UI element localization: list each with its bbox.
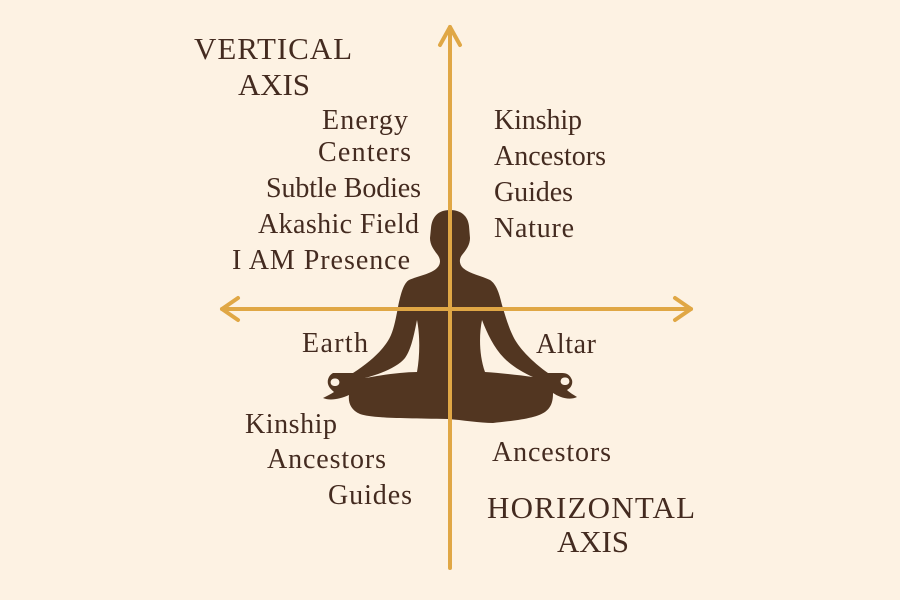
lower-left list: Ancestors [267,444,386,475]
upper-right list: Nature [494,213,574,244]
label: altar: Altar [536,329,597,360]
upper-left list: vertical axis items: Centers [318,137,411,168]
upper-left list: vertical axis items: Subtle Bodies [266,173,421,204]
upper-right list: Kinship [494,105,582,136]
upper-right list [494,105,606,244]
heading: vertical axis [194,31,352,102]
heading: horizontal axis: AXIS [557,524,629,559]
upper-left list: vertical axis items [232,105,421,276]
heading: horizontal axis: HORIZONTAL [487,490,695,525]
upper-left list: vertical axis items: Energy [322,105,408,136]
heading: vertical axis: AXIS [238,67,310,102]
meditating figure silhouette [323,210,577,423]
heading: horizontal axis [487,490,695,559]
lower-left list: Guides [328,480,412,511]
lower-left list [245,409,412,511]
vertical axis arrow [440,27,460,568]
label: earth: Earth [302,328,368,359]
heading: vertical axis: VERTICAL [194,31,352,66]
upper-right list: Guides [494,177,573,208]
upper-left list: vertical axis items: I AM Presence [232,245,410,276]
upper-right list: Ancestors [494,141,606,172]
horizontal axis arrow [222,298,691,320]
label: ancestors, lower right: Ancestors [492,437,611,468]
lower-left list: Kinship [245,409,337,440]
upper-left list: vertical axis items: Akashic Field [258,209,419,240]
